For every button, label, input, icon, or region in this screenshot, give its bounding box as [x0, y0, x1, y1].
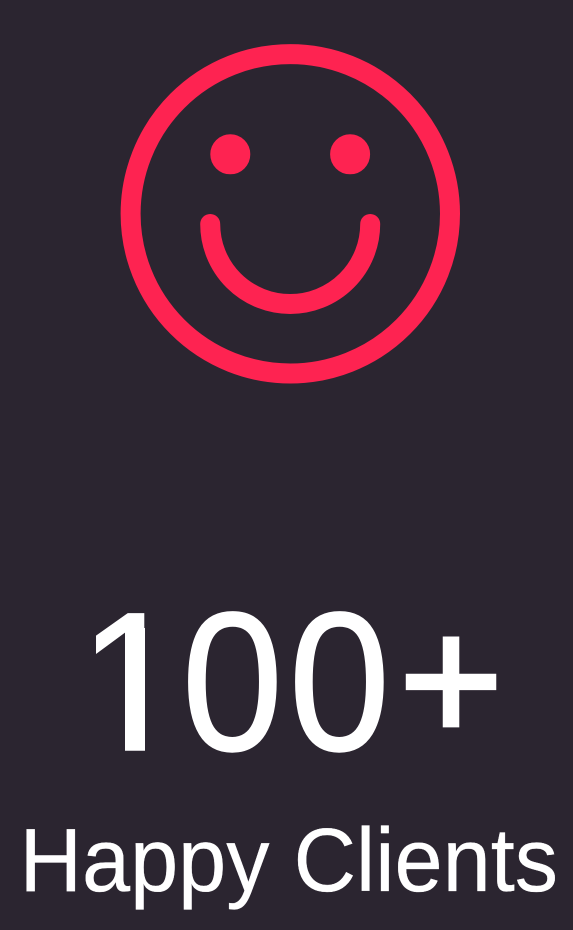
- number: 100+: +: [399, 579, 503, 779]
- number: 100+: [78, 570, 503, 792]
- icon: smiley face: [120, 44, 460, 384]
- number: 100+: 0: [289, 570, 390, 792]
- number: 100+: 0: [182, 570, 283, 792]
- label: Happy Clients: Happy Clients: [20, 810, 558, 910]
- number: 100+: 1: [78, 570, 185, 792]
